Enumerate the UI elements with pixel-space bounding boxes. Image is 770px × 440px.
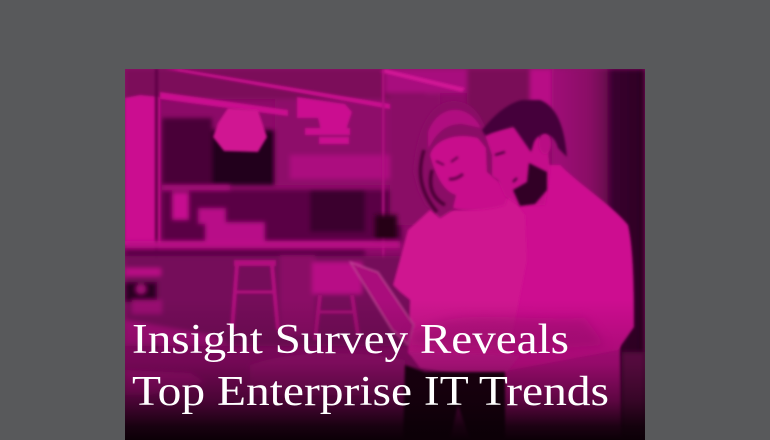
man's hair	[482, 100, 567, 157]
background: right dark column	[552, 69, 645, 440]
icon: second stool	[315, 295, 358, 340]
background: shelves and counter items	[125, 185, 400, 259]
bottom dark gradient	[125, 300, 645, 440]
person: woman	[393, 101, 527, 375]
panel: duotone magenta photo	[125, 69, 645, 440]
background: lower floor area	[125, 255, 415, 395]
woman's hem	[408, 353, 518, 373]
laptop lid	[350, 262, 414, 345]
background: left pink column	[125, 95, 160, 245]
man's face and neck	[484, 125, 550, 206]
icon: pendant lamp left	[213, 108, 267, 152]
person: man's shirt	[510, 164, 636, 370]
dark trousers	[403, 365, 505, 440]
background: ceiling beams and glass post	[155, 69, 465, 349]
title line 1: Insight Survey Reveals	[132, 317, 569, 363]
shirt fold shadows	[410, 317, 605, 350]
photo backdrop	[125, 69, 645, 440]
woman's shirt	[392, 198, 526, 355]
icon: pendant lamp right	[297, 97, 352, 144]
right-side figure edge	[622, 350, 644, 422]
title	[132, 317, 609, 415]
woman's hair crown highlight	[428, 110, 481, 150]
man's lower shirt area	[504, 346, 622, 431]
woman's hair back	[430, 106, 484, 219]
woman's smile and eyes	[436, 157, 463, 179]
man's ear	[539, 134, 551, 154]
icon: bar stool	[232, 260, 278, 330]
woman's face and neck	[430, 136, 510, 210]
background: upper cafe interior	[125, 69, 554, 242]
man's eyes	[495, 152, 517, 182]
man's beard	[513, 163, 547, 206]
person: man's head	[482, 100, 567, 206]
title line 2: Top Enterprise IT Trends	[132, 369, 609, 415]
woman's dark hair strands	[420, 150, 445, 212]
